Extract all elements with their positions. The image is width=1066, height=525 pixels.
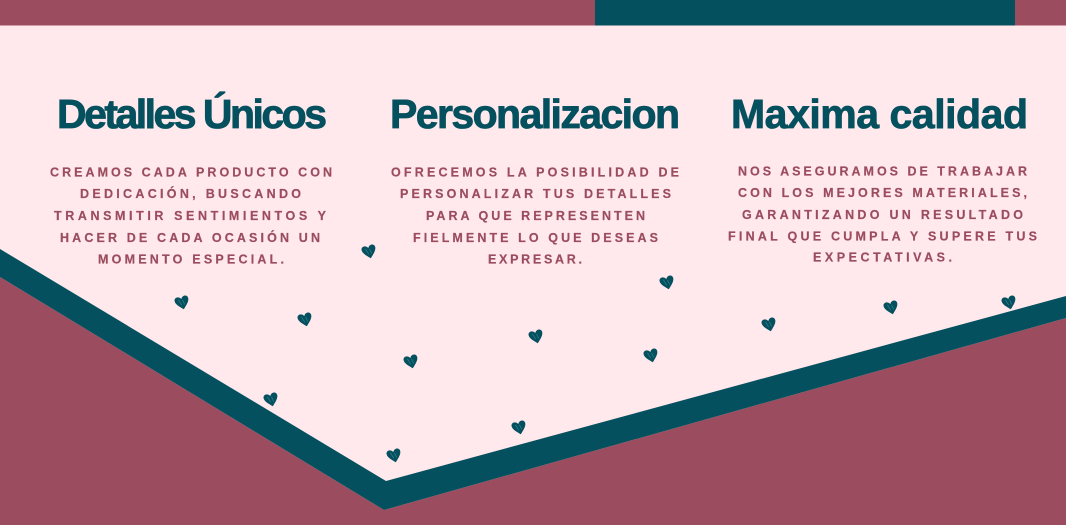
text block: ofrecemos: FIELMENTE LO QUE DESEAS [413,231,658,245]
heading: Maxima calidad: Maxima calidad [731,91,1028,137]
icon: heart [883,300,900,316]
text block: nos aseguramos [728,164,1037,264]
bottom maroon shape [0,277,1066,525]
icon: heart [386,448,403,464]
text block: ofrecemos: PARA QUE REPRESENTEN [426,209,645,223]
column: Personalizacion [390,91,680,266]
text block: creamos [50,166,332,266]
heading: Detalles Únicos: Detalles Únicos [57,91,327,137]
text block: creamos: HACER DE CADA OCASIÓN UN [60,230,320,245]
heading: Personalizacion: Personalizacion [390,91,680,137]
teal chevron band [0,249,1066,510]
text block: ofrecemos: EXPRESAR. [488,252,582,266]
text block: ofrecemos: PERSONALIZAR TUS DETALLES [400,187,671,201]
icon: heart [174,295,191,311]
icon: heart [1001,295,1018,311]
icon: heart [297,312,314,328]
text block: ofrecemos [391,166,679,266]
icon: heart [659,275,676,291]
column: Maxima calidad [728,91,1037,264]
text block: creamos: MOMENTO ESPECIAL. [98,252,284,266]
icon: heart [263,392,280,408]
text block: nos aseguramos: CON LOS MEJORES MATERIALES, [738,186,1027,200]
text block: nos aseguramos: GARANTIZANDO UN RESULTADO [742,208,1023,222]
text block: ofrecemos: OFRECEMOS LA POSIBILIDAD DE [391,166,679,180]
text block: creamos: TRANSMITIR SENTIMIENTOS Y [54,209,327,223]
text block: nos aseguramos: FINAL QUE CUMPLA Y SUPERE TUS [728,230,1037,244]
text block: creamos: DEDICACIÓN, BUSCANDO [80,186,301,201]
icon: heart [643,348,660,364]
icon: heart [528,329,545,345]
text block: creamos: CREAMOS CADA PRODUCTO CON [50,166,332,180]
icon: heart [511,420,528,436]
text block: nos aseguramos: NOS ASEGURAMOS DE TRABAJAR [738,164,1027,178]
top maroon band [0,0,1066,26]
top teal bar [595,0,1015,26]
icon group: scattered hearts [174,244,1018,464]
icon: heart [761,317,778,333]
icon: heart [403,354,420,370]
icon: heart [361,244,378,260]
text block: nos aseguramos: EXPECTATIVAS. [813,250,952,264]
column: Detalles Únicos [50,91,332,266]
